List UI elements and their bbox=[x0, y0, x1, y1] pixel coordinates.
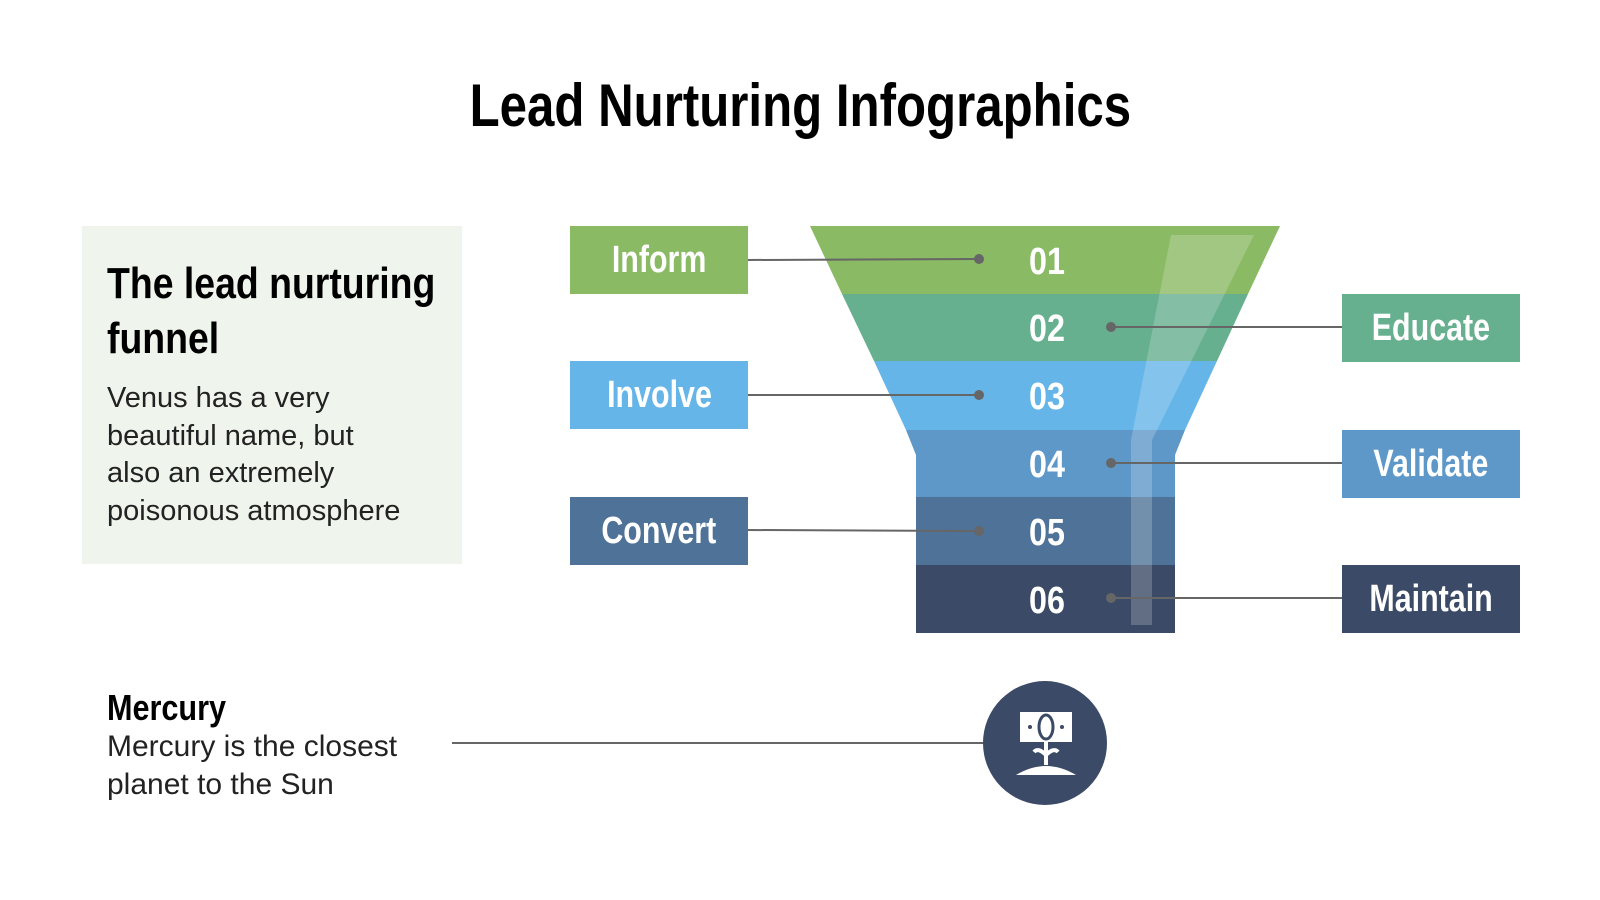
funnel stage 05 bbox=[916, 497, 1175, 565]
label: Inform bbox=[570, 226, 748, 294]
funnel stage 02 bbox=[842, 294, 1248, 361]
panel body text: poisonous atmosphere bbox=[107, 494, 400, 526]
panel heading: funnel bbox=[107, 314, 219, 363]
mercury body: Mercury is the closest planet to the Sun bbox=[107, 730, 397, 800]
funnel stage 06: 06 bbox=[1029, 580, 1065, 622]
panel body text: Venus has a very bbox=[107, 382, 329, 414]
funnel stage 04 bbox=[906, 430, 1185, 497]
funnel stage 03: 03 bbox=[1029, 376, 1065, 418]
label: Validate: Validate bbox=[1374, 443, 1488, 485]
label: Convert: Convert bbox=[602, 510, 716, 552]
label: Involve: Involve bbox=[607, 374, 711, 416]
panel heading bbox=[107, 259, 435, 363]
connector lines bbox=[452, 255, 1342, 743]
funnel stage 01 bbox=[810, 226, 1280, 294]
label: Involve bbox=[570, 361, 748, 429]
panel body text: also an extremely bbox=[107, 457, 334, 489]
funnel stage 03 bbox=[874, 361, 1217, 430]
label: Maintain bbox=[1342, 565, 1520, 633]
panel body text: beautiful name, but bbox=[107, 420, 354, 452]
panel heading: The lead nurturing bbox=[107, 259, 435, 308]
panel body text bbox=[107, 382, 400, 526]
mercury text block bbox=[107, 687, 397, 800]
funnel stage 02: 02 bbox=[1029, 308, 1065, 350]
label: Inform: Inform bbox=[612, 239, 706, 281]
label: Validate bbox=[1342, 430, 1520, 498]
label: Convert bbox=[570, 497, 748, 565]
funnel stage 04: 04 bbox=[1029, 444, 1065, 486]
funnel stage 05: 05 bbox=[1029, 512, 1065, 554]
label: Educate bbox=[1342, 294, 1520, 362]
label: Educate: Educate bbox=[1372, 307, 1490, 349]
funnel stage 01: 01 bbox=[1029, 241, 1065, 283]
icon: money plant circle bbox=[983, 681, 1107, 805]
panel: lead nurturing funnel bbox=[82, 226, 462, 564]
title: Lead Nurturing Infographics bbox=[469, 72, 1131, 139]
funnel stage 06 bbox=[916, 565, 1175, 633]
funnel highlight bbox=[1131, 235, 1254, 625]
mercury heading: Mercury bbox=[107, 687, 226, 728]
label: Maintain: Maintain bbox=[1369, 578, 1493, 620]
